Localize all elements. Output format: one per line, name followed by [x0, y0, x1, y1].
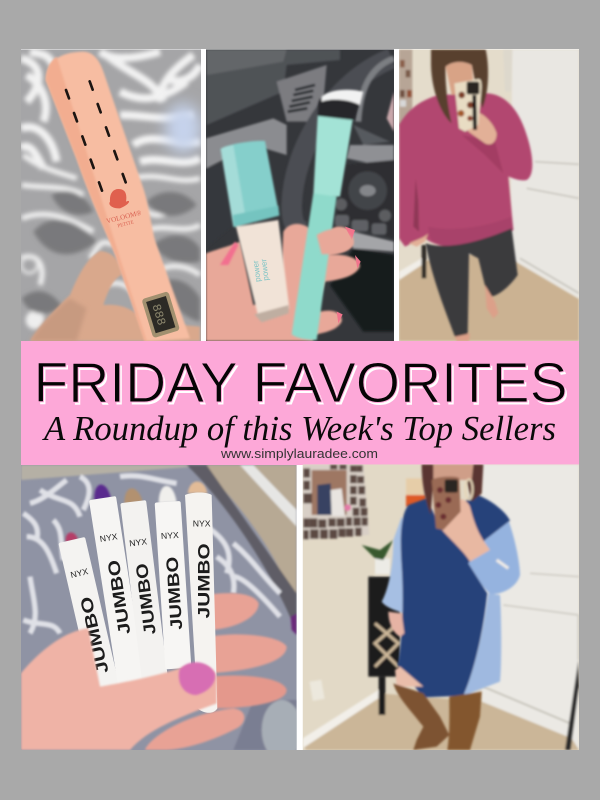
pink title banner: [21, 341, 579, 465]
palm and thumb: [21, 628, 217, 750]
pencil 4: [154, 485, 191, 669]
pencil 5: NYX: [193, 519, 211, 529]
website url: www.simplylauradee.com: [220, 446, 378, 461]
hand holding tool: [30, 251, 200, 341]
carpet: [303, 693, 579, 750]
pants: [426, 228, 518, 337]
brand logo: PETITE: [117, 220, 135, 229]
brand logo: [106, 189, 141, 228]
feet: [485, 285, 498, 318]
door: [482, 464, 579, 750]
earring: [465, 479, 473, 499]
hair: [422, 464, 483, 515]
photo strip: [399, 49, 412, 126]
pencil 1: NYX: [70, 566, 89, 580]
photo: foundation bottle and brush in car: power: [251, 259, 263, 283]
photo: woman in magenta sweater: [399, 49, 579, 341]
digital display: 888: [149, 302, 168, 327]
pencil 2: JUMBO: [104, 559, 134, 636]
phone: [454, 79, 482, 132]
table and plant: [368, 577, 400, 677]
outlet: [309, 680, 325, 701]
painted thumbnail: [179, 662, 215, 695]
blue shirt sleeves: [380, 517, 404, 614]
brand logo: VOLOOM®: [105, 209, 143, 225]
digital display: [141, 291, 180, 338]
hair: [431, 49, 488, 123]
navy dress: [398, 493, 510, 697]
photo: pink hair straightener on damask fabric: [21, 49, 202, 341]
face: [446, 62, 473, 95]
sweater: [399, 93, 532, 247]
pencil 3: NYX: [129, 536, 148, 548]
pencil 2: NYX: [99, 531, 118, 544]
carpet: [399, 253, 579, 341]
foundation bottle: [221, 141, 289, 322]
photo: foundation bottle and brush in car: power: [259, 258, 271, 281]
pencil 1: [57, 529, 120, 693]
pencil 5: JUMBO: [194, 543, 213, 618]
hand fingers behind pencils: [145, 593, 287, 750]
orange box on shelf: [406, 478, 424, 495]
vent slots: [66, 81, 126, 191]
photo: NYX jumbo eye pencils in hand: [21, 465, 302, 760]
pencil 4: NYX: [161, 530, 179, 541]
photo: foundation bottle and brush in car: [206, 49, 394, 341]
hair tool body: [46, 52, 190, 341]
subtitle: A Roundup of this Week's Top Sellers: [42, 409, 556, 448]
title shadow: FRIDAY FAVORITES: [36, 354, 570, 418]
pencil 4: JUMBO: [163, 556, 186, 630]
photo: woman in navy and blue shirt dress: [303, 464, 579, 750]
phone: [432, 477, 461, 530]
hand: [206, 224, 360, 341]
title: Friday Favorites: FRIDAY FAVORITES: [34, 351, 568, 415]
door: [510, 49, 579, 298]
arm/hand: [465, 112, 497, 144]
wall photo collage: [303, 464, 369, 540]
pencil 1: JUMBO: [76, 595, 113, 675]
pencil 3: JUMBO: [132, 562, 160, 636]
blue shirt panel of dress: [463, 593, 501, 696]
pencil 5: [185, 481, 217, 713]
makeup brush: [292, 90, 363, 340]
arms: [388, 612, 404, 637]
pencil 2: [87, 483, 145, 686]
finger over brush: [317, 229, 353, 254]
boots: [393, 683, 449, 750]
pencil 3: [119, 487, 168, 680]
